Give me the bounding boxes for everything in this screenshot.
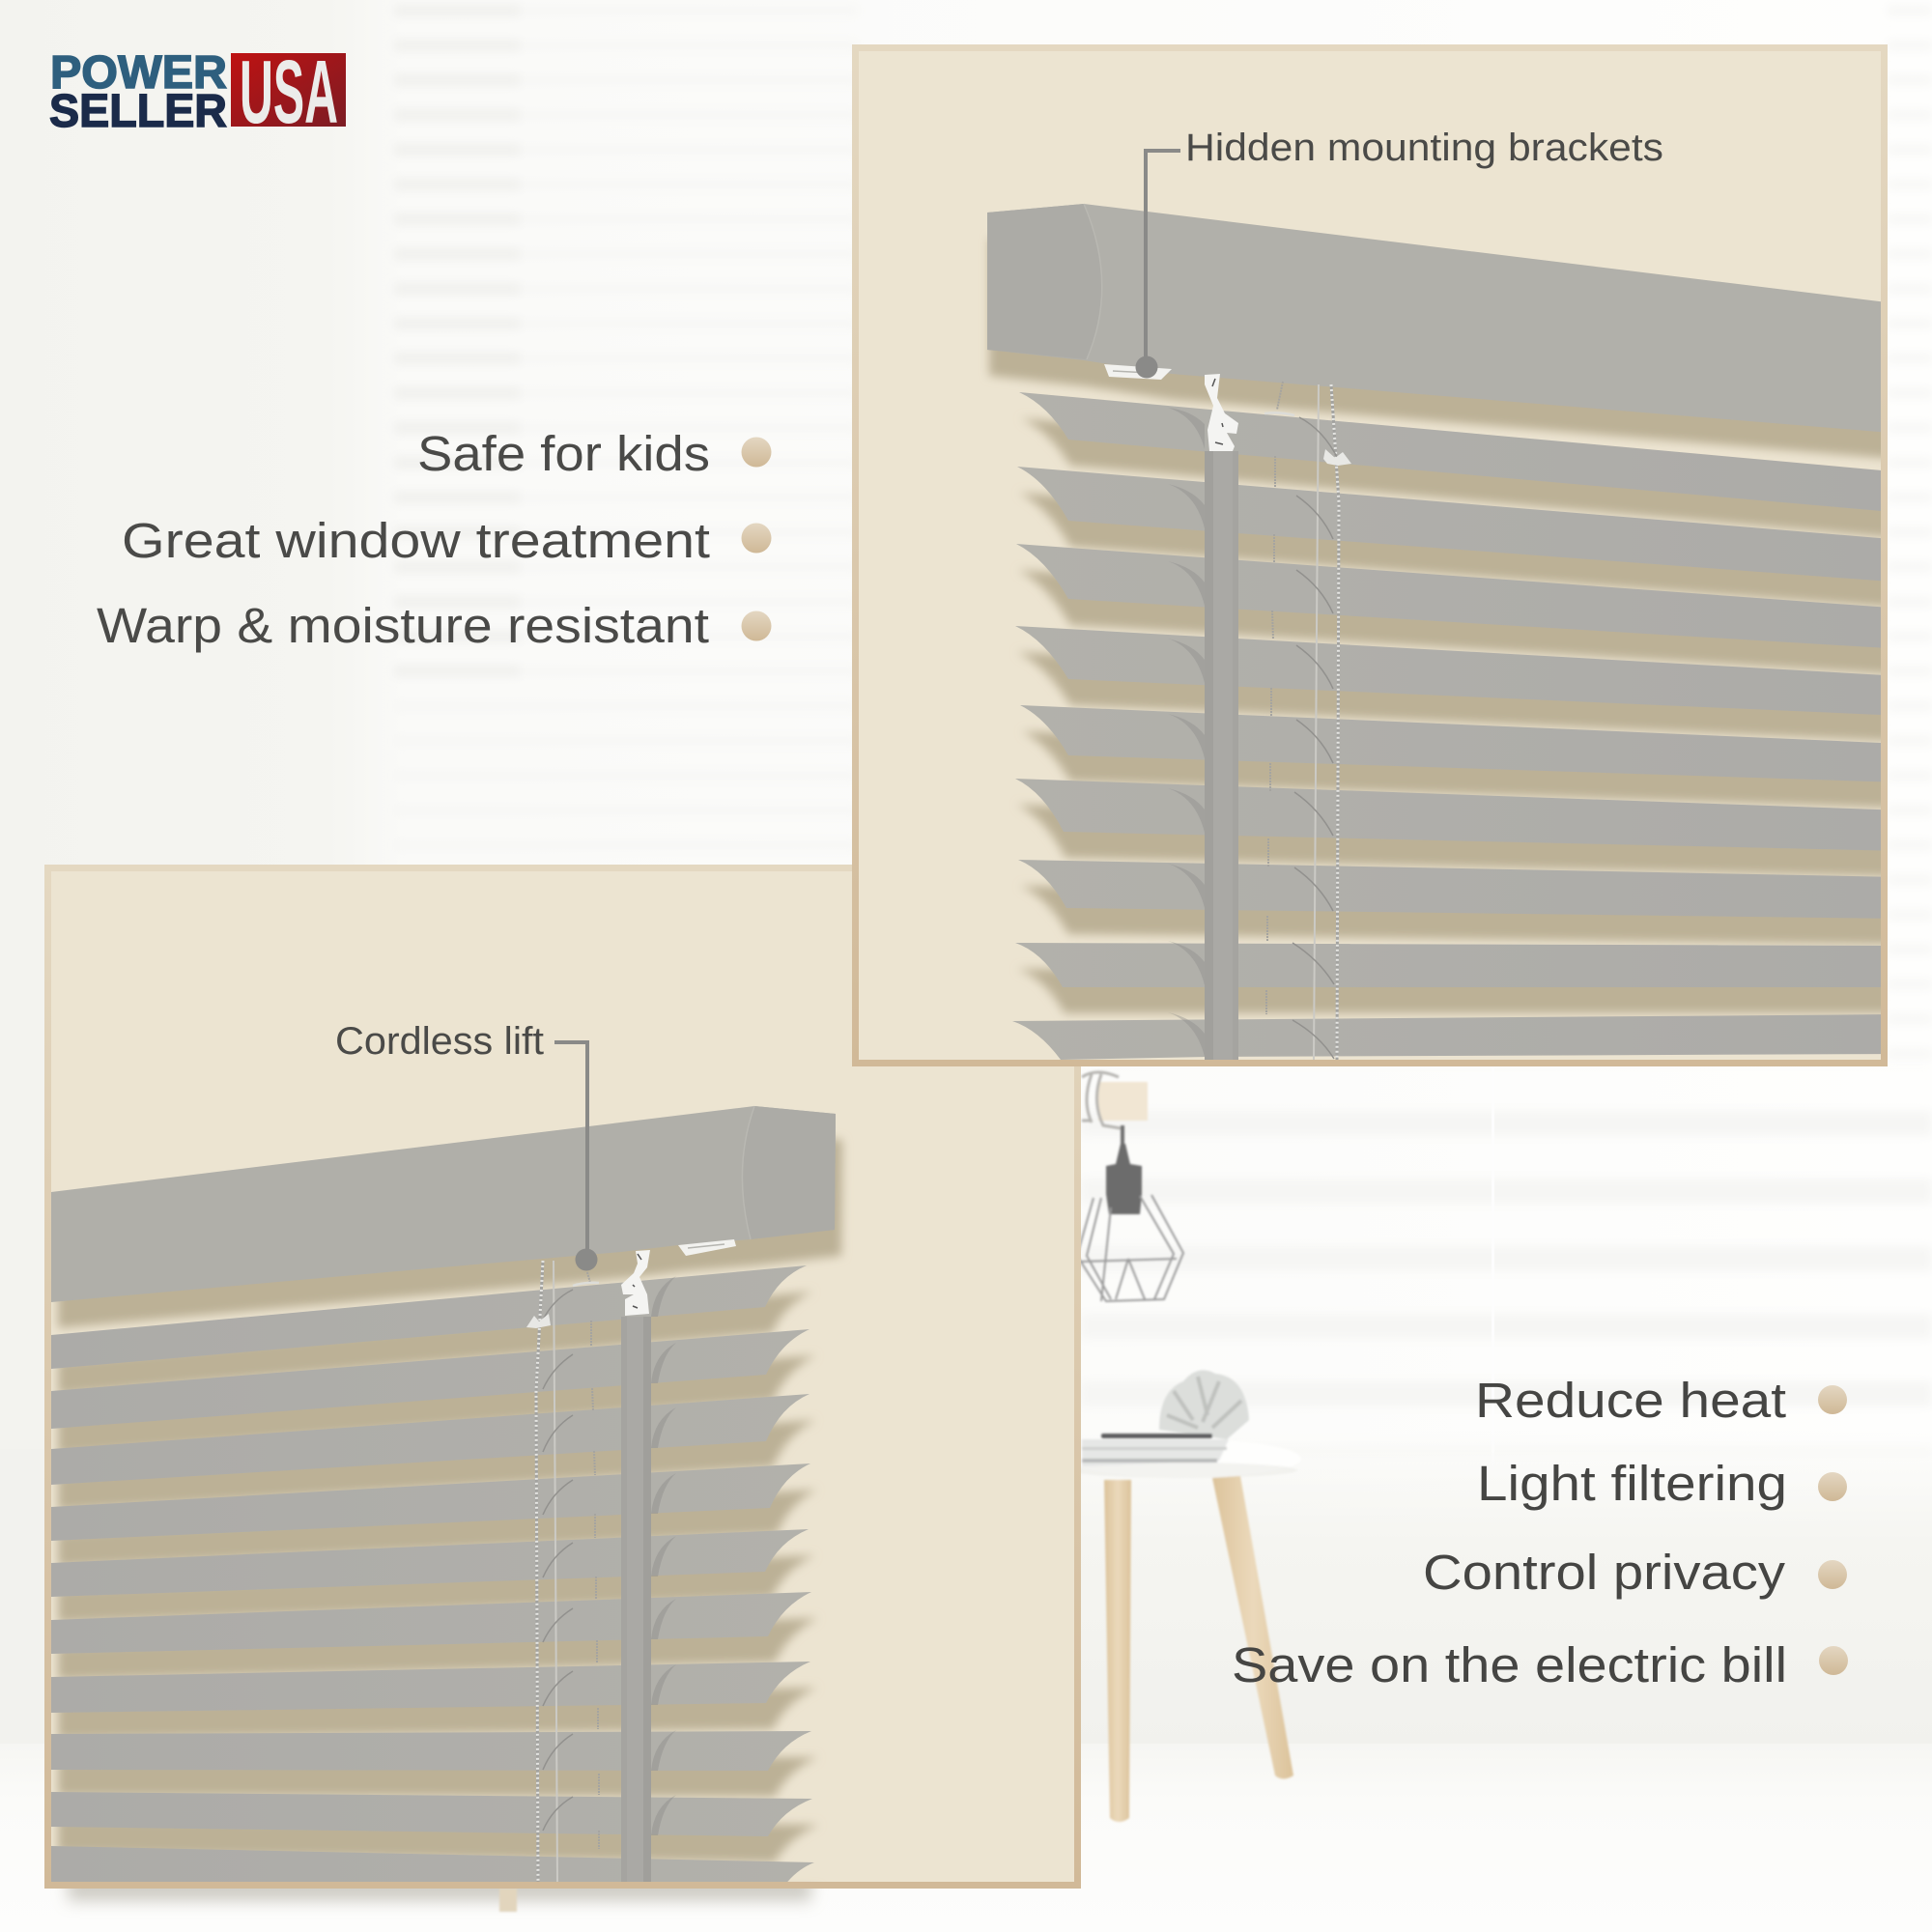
feature: warp and moisture resistant: Warp & moisture resistant: [97, 598, 709, 653]
callout: cordless lift: [335, 1020, 597, 1271]
blind: mounting brackets close-up: [987, 204, 1903, 1069]
feature: reduce heat: Reduce heat: [1475, 1373, 1786, 1428]
white hardware: clips and bracket: [1104, 364, 1351, 466]
slat curve shading: [1168, 408, 1205, 1057]
feature: control privacy: Control privacy: [1423, 1545, 1786, 1600]
ladder cords: [1266, 382, 1339, 1060]
side table with plant and books: [1065, 1370, 1301, 1822]
panel: cordless lift: [48, 867, 1078, 1887]
ladder column: [1205, 451, 1238, 1069]
logo: Power Seller USA: POWER: [50, 47, 227, 99]
ladder cords: [536, 1261, 599, 1884]
feature: light filtering: Light filtering: [1477, 1456, 1787, 1511]
slats: [51, 1265, 814, 1886]
headrail: [987, 204, 1903, 434]
slats: [1012, 392, 1903, 1060]
feature: great window treatment: Great window treatment: [122, 513, 710, 568]
white hardware: clips and bracket: [526, 1239, 736, 1328]
blind: cordless lift close-up: [51, 1106, 836, 1887]
ladder column: [621, 1317, 651, 1887]
callout: hidden mounting brackets: [1136, 127, 1663, 379]
feature: save on the electric bill: Save on the electric bill: [1232, 1637, 1787, 1692]
slat curve shading: [651, 1276, 676, 1835]
headrail: [51, 1106, 836, 1302]
callout: cordless lift: Cordless lift: [335, 1020, 544, 1063]
feature list: upper left: [97, 426, 771, 653]
panel: hidden mounting brackets: [856, 48, 1903, 1069]
logo: Power Seller USA: SELLER: [49, 86, 227, 137]
lamp: [1077, 1072, 1183, 1301]
feature list: lower right: [1232, 1373, 1848, 1692]
logo: Power Seller USA: USA: [240, 42, 338, 142]
feature: safe for kids: Safe for kids: [417, 426, 710, 481]
logo: Power Seller USA: [49, 42, 346, 142]
callout: hidden mounting brackets: Hidden mounting brackets: [1185, 127, 1663, 169]
